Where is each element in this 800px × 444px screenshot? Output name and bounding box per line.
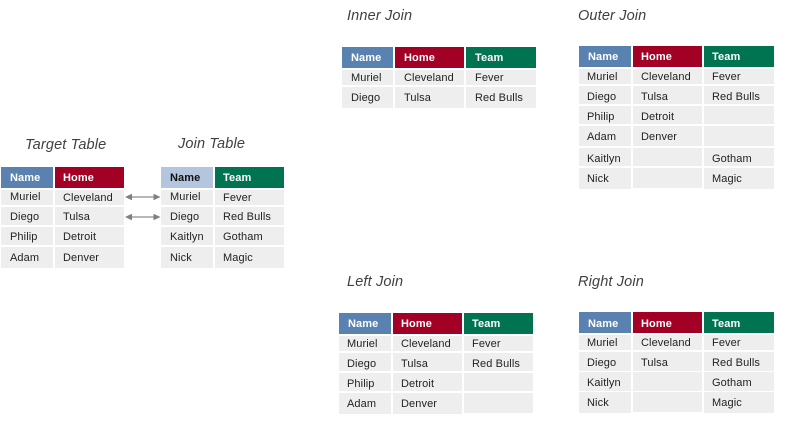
- row: Muriel: [161, 190, 284, 205]
- row: Diego: Tulsa: [641, 91, 668, 103]
- row: Kaitlyn: [579, 148, 774, 166]
- row: Philip: Philip: [10, 231, 38, 243]
- row: Nick: Nick: [587, 397, 609, 409]
- row: Muriel: Muriel: [10, 191, 41, 203]
- row: Diego: [161, 207, 284, 225]
- row: Muriel: [342, 70, 536, 85]
- row: Muriel: Fever: [223, 192, 252, 204]
- table: left join: [339, 313, 533, 414]
- row: Kaitlyn: Kaitlyn: [587, 377, 621, 389]
- header row: Name: [351, 52, 381, 64]
- table: outer join: [579, 46, 774, 189]
- header row: [161, 167, 284, 188]
- row: Adam: [579, 126, 774, 146]
- row: Kaitlyn: Kaitlyn: [170, 231, 204, 243]
- row: Muriel: [339, 336, 533, 351]
- row: Adam: Denver: [641, 131, 677, 143]
- row: Philip: Philip: [347, 378, 375, 390]
- row: Philip: [579, 106, 774, 124]
- header row: Home: [641, 51, 672, 63]
- heading: Target Table: Target Table: [25, 137, 106, 153]
- row: Muriel: Fever: [712, 337, 741, 349]
- header row: Team: [712, 318, 740, 330]
- row: Diego: Diego: [587, 91, 616, 103]
- row: Philip: Detroit: [641, 111, 674, 123]
- heading: Left Join: Left Join: [347, 274, 403, 290]
- row: Diego: Red Bulls: [223, 211, 271, 223]
- row: Muriel: Fever: [475, 72, 504, 84]
- row: Adam: [339, 393, 533, 414]
- row: Kaitlyn: Kaitlyn: [587, 153, 621, 165]
- table: right join: [579, 312, 774, 413]
- row: Diego: [342, 87, 536, 108]
- heading: Right Join: Right Join: [578, 274, 644, 290]
- row: Nick: Magic: [712, 397, 742, 409]
- row: Adam: Adam: [10, 252, 39, 264]
- row: Kaitlyn: [161, 227, 284, 245]
- header row: [579, 46, 774, 67]
- row: Diego: [579, 86, 774, 104]
- heading: Outer Join: Outer Join: [578, 8, 646, 24]
- header row: Name: [348, 318, 378, 330]
- arrow: Muriel: [125, 194, 160, 200]
- row: Diego: [579, 352, 774, 371]
- row: Muriel: Fever: [712, 71, 741, 83]
- row: Adam: Denver: [401, 398, 437, 410]
- row: Diego: Diego: [587, 357, 616, 369]
- row: Muriel: Fever: [472, 338, 501, 350]
- header row: Home: [63, 172, 94, 184]
- arrow: Diego: [125, 214, 160, 220]
- row: Kaitlyn: Gotham: [712, 377, 752, 389]
- table: target: [1, 167, 124, 268]
- row: Nick: Magic: [223, 252, 253, 264]
- header row: Name: [170, 172, 200, 184]
- row: Kaitlyn: Gotham: [712, 153, 752, 165]
- row: Adam: Adam: [347, 398, 376, 410]
- heading: Join Table: Join Table: [178, 136, 245, 152]
- table: inner join: [342, 47, 536, 108]
- row: Philip: Detroit: [401, 378, 434, 390]
- row: Diego: Diego: [170, 211, 199, 223]
- row: Diego: Tulsa: [63, 211, 90, 223]
- row: Diego: Diego: [351, 92, 380, 104]
- heading: Inner Join: Inner Join: [347, 8, 412, 24]
- row: Adam: [1, 247, 124, 268]
- row: Muriel: Muriel: [587, 337, 618, 349]
- header row: Name: [588, 318, 618, 330]
- header row: [339, 313, 533, 334]
- row: Muriel: [579, 335, 774, 350]
- header row: Name: [10, 172, 40, 184]
- row: Muriel: Muriel: [351, 72, 382, 84]
- row: Muriel: [579, 69, 774, 84]
- row: Kaitlyn: Gotham: [223, 231, 263, 243]
- row: Diego: Red Bulls: [475, 92, 523, 104]
- arrows: matching rows: [125, 194, 160, 220]
- row: Philip: Detroit: [63, 231, 96, 243]
- header row: Home: [401, 318, 432, 330]
- row: Philip: [339, 373, 533, 391]
- header row: Team: [472, 318, 500, 330]
- header row: [342, 47, 536, 68]
- header row: [1, 167, 124, 188]
- header row: [579, 312, 774, 333]
- header row: Team: [475, 52, 503, 64]
- row: Diego: Tulsa: [404, 92, 431, 104]
- table: join: [161, 167, 284, 268]
- row: Nick: Nick: [587, 173, 609, 185]
- row: Philip: [1, 227, 124, 245]
- row: Diego: Diego: [347, 358, 376, 370]
- row: Diego: Tulsa: [401, 358, 428, 370]
- row: Muriel: Muriel: [170, 191, 201, 203]
- header row: Home: [404, 52, 435, 64]
- row: Diego: Diego: [10, 211, 39, 223]
- row: Diego: [339, 353, 533, 371]
- header row: Home: [641, 318, 672, 330]
- row: Adam: Adam: [587, 131, 616, 143]
- row: Diego: Tulsa: [641, 357, 668, 369]
- row: Adam: Denver: [63, 252, 99, 264]
- row: Muriel: Cleveland: [641, 337, 691, 349]
- row: Kaitlyn: [579, 372, 774, 391]
- header row: Name: [588, 51, 618, 63]
- row: Muriel: Muriel: [587, 71, 618, 83]
- row: Nick: [579, 392, 774, 413]
- row: Muriel: Cleveland: [401, 338, 451, 350]
- row: Nick: [161, 247, 284, 268]
- row: Diego: Red Bulls: [712, 357, 760, 369]
- header row: Team: [712, 51, 740, 63]
- row: Philip: Philip: [587, 111, 615, 123]
- row: Muriel: Cleveland: [404, 72, 454, 84]
- header row: Team: [223, 172, 251, 184]
- row: Muriel: [1, 190, 124, 205]
- row: Muriel: Muriel: [347, 338, 378, 350]
- row: Muriel: Cleveland: [63, 192, 113, 204]
- row: Muriel: Cleveland: [641, 71, 691, 83]
- row: Diego: [1, 207, 124, 225]
- row: Nick: Nick: [170, 252, 192, 264]
- row: Diego: Red Bulls: [712, 91, 760, 103]
- row: Nick: [579, 168, 774, 189]
- row: Diego: Red Bulls: [472, 358, 520, 370]
- row: Nick: Magic: [712, 173, 742, 185]
